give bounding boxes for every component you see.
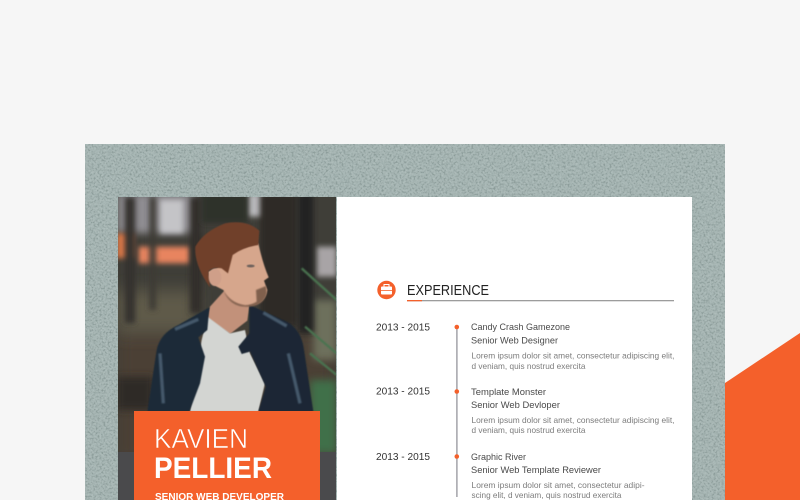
beard (223, 286, 267, 307)
t-shirt (190, 317, 265, 412)
entry: template monster: 2013 - 2015 (376, 386, 430, 398)
entry: template monster (376, 386, 674, 435)
leather jacket (147, 307, 209, 412)
neck (207, 290, 250, 334)
name card (134, 411, 320, 500)
entry: graphic river: Graphic River (471, 452, 526, 463)
entry: graphic river: scing elit, d veniam, quis nostrud exercita (472, 490, 622, 500)
dark trunks (125, 197, 135, 323)
timeline (454, 325, 459, 497)
entry: template monster: Senior Web Devloper (471, 400, 560, 411)
forest floor (120, 334, 334, 452)
entry: graphic river (376, 451, 645, 500)
entry: graphic river: 2013 - 2015 (376, 451, 430, 463)
entry: candy crash: Lorem ipsum dolor sit amet, consectetur adipiscing elit, (472, 350, 674, 360)
face (208, 243, 269, 305)
entry: candy crash (376, 322, 674, 371)
fern (302, 268, 337, 375)
resume mockup scene (85, 144, 800, 500)
white resume page (337, 197, 692, 500)
portrait photo (117, 193, 337, 463)
icon: briefcase (377, 281, 396, 299)
entry: template monster: d veniam, quis nostrud exercita (472, 425, 586, 435)
sunset (117, 233, 133, 258)
entry: candy crash: 2013 - 2015 (376, 322, 430, 334)
entry: template monster: Template Monster (471, 387, 546, 398)
entry: template monster: Lorem ipsum dolor sit amet, consectetur adipiscing elit, (472, 415, 674, 425)
ear (208, 268, 216, 287)
entry: graphic river: Senior Web Template Reviewer (471, 465, 601, 476)
entry: candy crash: Candy Crash Gamezone (471, 322, 570, 333)
hair (195, 222, 259, 287)
first name: KAVIEN (154, 423, 248, 454)
sky glow (117, 193, 197, 233)
entry: candy crash: d veniam, quis nostrud exercita (472, 361, 586, 371)
last name: PELLIER (154, 452, 272, 485)
heading: experience: EXPERIENCE (407, 283, 489, 299)
eye (247, 265, 255, 267)
entry: candy crash: Senior Web Designer (471, 336, 558, 346)
heading underline (407, 300, 674, 301)
orange triangle accent (725, 333, 800, 500)
entry: graphic river: Lorem ipsum dolor sit amet, consectetur adipi- (472, 480, 645, 490)
dark band under photo (118, 452, 336, 500)
concrete panel (85, 144, 725, 500)
